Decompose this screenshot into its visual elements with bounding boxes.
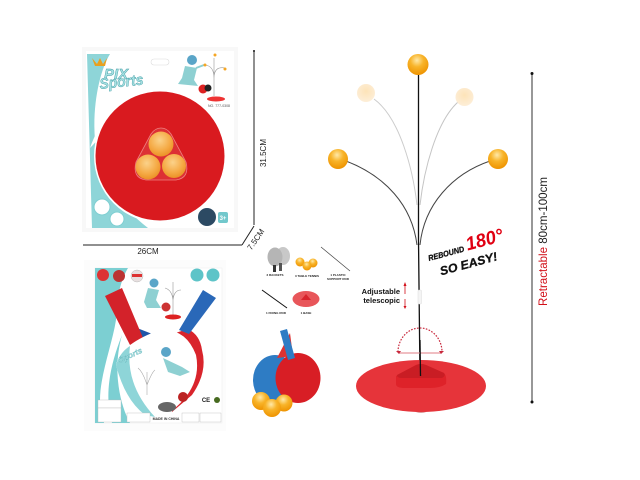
package brand logo: Sports bbox=[99, 71, 144, 93]
package feature badges bbox=[94, 199, 228, 226]
blue racket bbox=[253, 355, 297, 405]
certification marks and warning labels bbox=[98, 397, 221, 422]
parts: base bbox=[292, 291, 320, 315]
package brand logo bbox=[92, 58, 144, 93]
red racket bbox=[276, 353, 320, 403]
parts: plastic support rod bbox=[321, 247, 350, 281]
adjustable telescopic label: Adjustable bbox=[362, 287, 400, 296]
yellow balls bbox=[252, 392, 292, 417]
adjustable telescopic label bbox=[362, 287, 400, 305]
package brand logo: PIX bbox=[104, 66, 129, 83]
trainer: right swing position bbox=[420, 149, 508, 245]
red base disc bbox=[96, 92, 224, 220]
blue packaged racket handle bbox=[179, 290, 216, 334]
dimension: package depth: 7.5CM bbox=[246, 227, 267, 252]
dimension: trainer height bbox=[530, 72, 534, 404]
package child illustration bbox=[144, 278, 181, 320]
blue handle bbox=[280, 329, 295, 360]
arrow: rotation arc bbox=[396, 328, 444, 354]
rebound slogan: 180° bbox=[463, 225, 506, 255]
trainer: faded right swing position bbox=[420, 88, 474, 205]
certification marks and warning labels: CE bbox=[202, 398, 210, 404]
package feature badges: 3+ bbox=[220, 216, 227, 222]
parts: plastic support rod: 1 PLASTIC bbox=[330, 273, 346, 277]
adjustable telescopic label: telescopic bbox=[363, 296, 400, 305]
package illustration: child with trainer: NO. 777-0308 bbox=[208, 104, 230, 108]
packaged balls in triangular holder bbox=[135, 128, 187, 180]
parts: 2 rackets: 2 RACKETS bbox=[266, 273, 284, 277]
height label: Retractable 80cm-100cm bbox=[536, 177, 550, 306]
parts: plastic support rod: SUPPORT ROD bbox=[327, 277, 350, 281]
parts: 3 table tennis balls: 3 TABLE TENNIS bbox=[295, 274, 319, 278]
dimension: package height: 31.5CM bbox=[259, 139, 268, 167]
red throat bbox=[277, 333, 293, 358]
white disc halo bbox=[94, 89, 228, 223]
white racket face bbox=[116, 330, 197, 417]
parts: 3 table tennis balls bbox=[295, 258, 319, 278]
trainer: faded left swing position bbox=[357, 84, 417, 205]
hanger hole bbox=[151, 59, 169, 65]
rebound slogan: REBOUND bbox=[427, 245, 465, 263]
rebound slogan bbox=[425, 225, 510, 280]
telescopic connector bbox=[418, 290, 422, 304]
trainer: center rod and top ball bbox=[408, 54, 428, 377]
package illustration: child with trainer bbox=[178, 54, 230, 108]
certification marks and warning labels: MADE IN CHINA bbox=[153, 417, 180, 421]
panel: boxed racket package bbox=[84, 260, 226, 431]
parts: 2 rackets bbox=[266, 247, 290, 277]
trainer base bbox=[356, 340, 486, 413]
parts: fixing rod bbox=[262, 290, 287, 315]
arrow: telescopic range bbox=[404, 282, 406, 309]
panel: boxed base package bbox=[82, 47, 238, 232]
red packaged racket handle bbox=[105, 288, 143, 345]
dimension: package width: 26CM bbox=[137, 247, 159, 256]
rebound slogan: SO EASY! bbox=[438, 249, 499, 278]
top badges bbox=[97, 268, 220, 282]
parts: base: 1 BASE bbox=[301, 311, 311, 315]
trainer: left swing position bbox=[328, 149, 417, 245]
white racket face: Sports bbox=[117, 346, 144, 365]
rackets and balls illustration bbox=[252, 329, 320, 417]
blue racket behind, red rim bbox=[137, 328, 204, 412]
parts: fixing rod: 1 FIXING ROD bbox=[266, 311, 287, 315]
